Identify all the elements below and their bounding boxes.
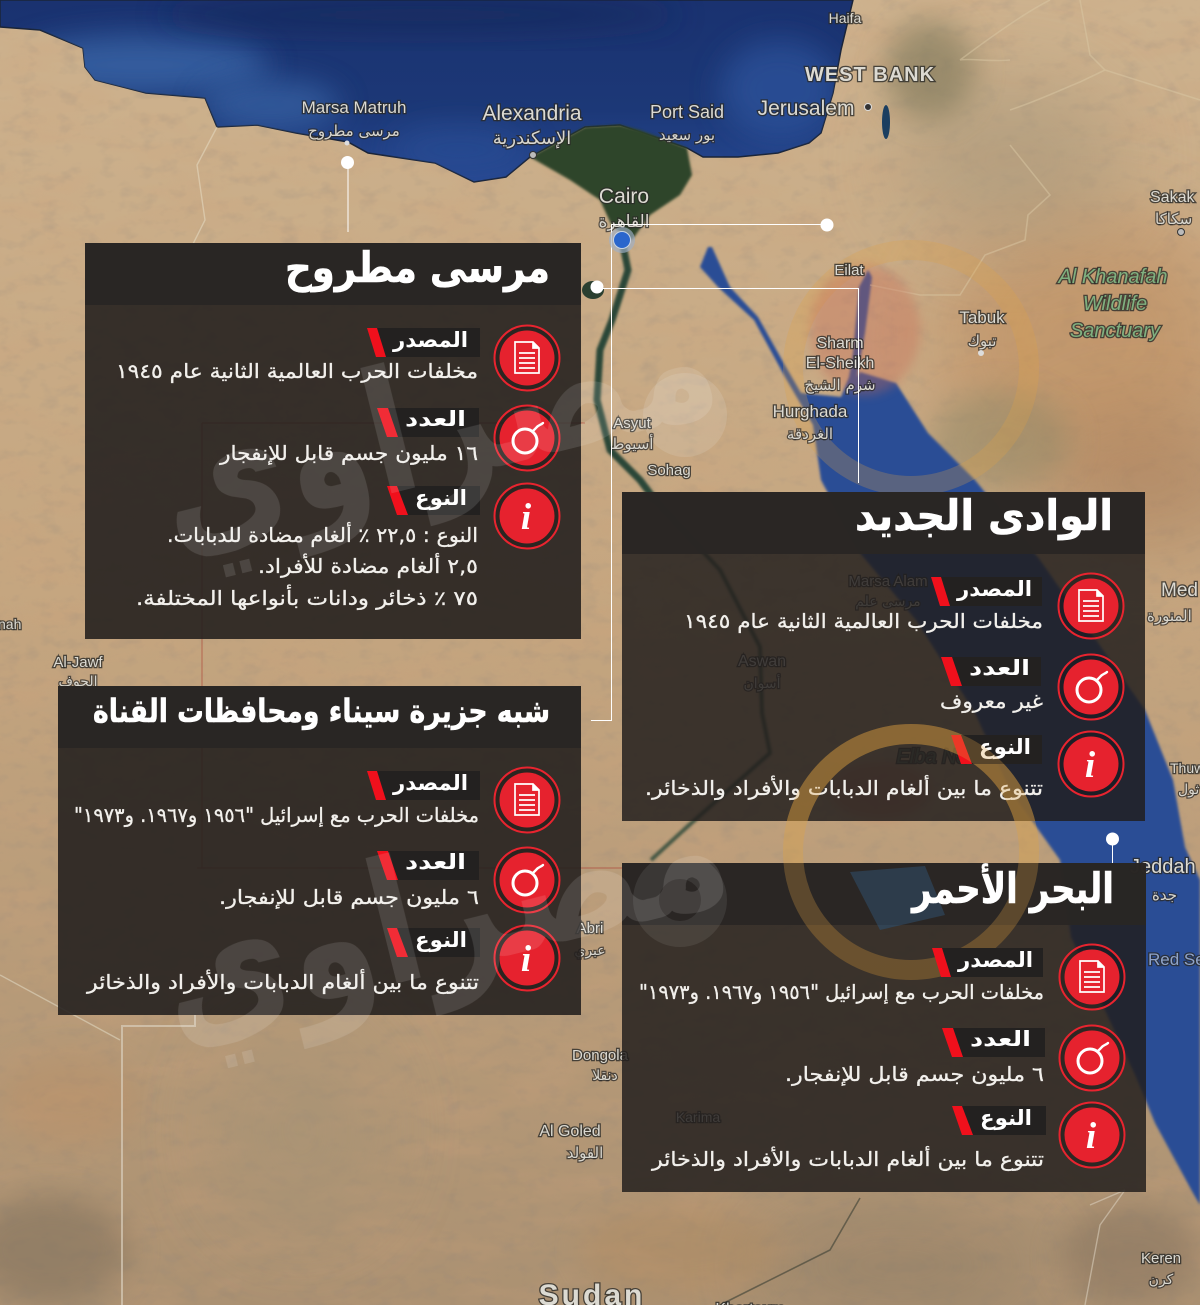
icon: bomb xyxy=(494,406,560,470)
map labels: Jeddah xyxy=(1130,856,1196,878)
map labels: القولد xyxy=(567,1144,603,1162)
count text: ٦ مليون جسم قابل للإنفجار. xyxy=(785,1062,1044,1086)
type text: تتنوع ما بين ألغام الدبابات والأفراد والذخائر xyxy=(651,1146,1044,1171)
tag: count xyxy=(377,407,479,437)
tag: type xyxy=(387,928,480,957)
icon: info xyxy=(494,926,560,990)
map labels: دنقلا xyxy=(592,1068,618,1084)
map labels: Marsa Alam xyxy=(848,573,928,590)
count text: ١٦ مليون جسم قابل للإنفجار xyxy=(219,441,478,465)
tag: type xyxy=(951,735,1042,764)
tag: source xyxy=(931,577,1042,606)
tag: count: العدد xyxy=(969,656,1030,680)
source text: مخلفات الحرب العالمية الثانية عام ١٩٤٥ xyxy=(684,609,1043,633)
map labels: Tabuk xyxy=(959,308,1005,327)
map labels: Eilat xyxy=(834,262,864,279)
map labels: Med xyxy=(1161,580,1198,601)
tag: source: المصدر xyxy=(392,771,468,795)
map labels: Cairo xyxy=(599,185,649,208)
tag: count xyxy=(942,1027,1045,1057)
map labels: Asyut xyxy=(613,415,652,432)
map labels: القاهرة xyxy=(599,212,649,232)
map labels: عبري xyxy=(574,943,606,959)
map labels: Alexandria xyxy=(482,102,582,125)
map labels: الإسكندرية xyxy=(493,128,571,149)
tag: count: العدد xyxy=(405,407,466,431)
watermark: Masrawy logotype: مصراوي xyxy=(137,746,747,1080)
map labels: بور سعيد xyxy=(659,126,715,144)
icon: document xyxy=(1058,574,1124,638)
type text: ٧٥ ٪ ذخائر ودانات بأنواعها المختلفة. xyxy=(136,584,478,610)
map labels: المنورة xyxy=(1147,607,1192,625)
tag: source: المصدر xyxy=(956,577,1032,601)
type text xyxy=(136,522,478,610)
map labels: Dongola xyxy=(572,1047,629,1064)
panel: Red Sea xyxy=(622,734,1146,1192)
panel title: مرسى مطروح xyxy=(285,243,550,293)
map labels: Al Goled xyxy=(539,1123,601,1140)
connector: Marsa Matruh pin xyxy=(341,156,354,232)
panel title: الوادى الجديد xyxy=(855,491,1113,541)
source text: مخلفات الحرب العالمية الثانية عام ١٩٤٥ xyxy=(116,359,478,383)
type text: تتنوع ما بين ألغام الدبابات والأفراد والذخائر xyxy=(86,969,479,994)
type text: تتنوع ما بين ألغام الدبابات والأفراد والذخائر. xyxy=(645,775,1043,800)
map labels: Keren xyxy=(1141,1250,1181,1267)
map labels: Al-Jawf xyxy=(53,654,103,671)
map labels: سكاكا xyxy=(1155,210,1192,228)
icon: info xyxy=(494,484,560,548)
map labels: مرسى مطروح xyxy=(308,122,400,140)
tag: source xyxy=(367,771,480,800)
tag: count xyxy=(377,850,479,880)
connector: Red Sea pin xyxy=(1106,832,1119,863)
map labels: Karima xyxy=(676,1109,720,1125)
map labels: Elba Na xyxy=(896,746,968,768)
map labels: Sharm xyxy=(816,335,864,352)
panel header xyxy=(622,492,1145,554)
tag: source xyxy=(367,328,480,357)
map labels: ثول xyxy=(1178,782,1199,798)
map labels: جدة xyxy=(1152,886,1177,904)
icon: info: i xyxy=(521,497,532,538)
icon: info: i xyxy=(1086,1116,1097,1157)
icon: bomb xyxy=(494,848,560,912)
icon: info xyxy=(1060,1102,1124,1168)
icon: document xyxy=(1060,944,1124,1010)
map labels: Port Said xyxy=(650,102,724,122)
tag: type: النوع xyxy=(979,735,1031,759)
panel: Marsa Matruh xyxy=(85,243,581,639)
panel title: البحر الأحمر xyxy=(910,863,1114,914)
tag: count: العدد xyxy=(970,1027,1031,1051)
connector: New Valley pin xyxy=(590,280,858,483)
connector: Sinai and canal pin xyxy=(591,218,834,720)
map labels: Wildlife xyxy=(1083,293,1147,315)
map labels: Sohag xyxy=(647,462,691,479)
map labels: Marsa Matruh xyxy=(302,98,406,117)
map labels: كرن xyxy=(1149,1272,1174,1288)
map labels: Abri xyxy=(577,920,603,937)
map labels: Haifa xyxy=(829,10,862,26)
watermark ring and shape over Red Sea panel xyxy=(646,734,1029,970)
source text: مخلفات الحرب مع إسرائيل "١٩٥٦ و١٩٦٧. و١٩٧٣" xyxy=(639,980,1044,1005)
panel header xyxy=(58,686,581,748)
panel header xyxy=(85,243,581,305)
count text: غير معروف xyxy=(940,689,1043,713)
icon: info xyxy=(1058,732,1124,796)
tag: type: النوع xyxy=(980,1106,1032,1130)
icon: bomb xyxy=(1060,1026,1124,1090)
tag: type: النوع xyxy=(415,486,467,510)
watermark: Masrawy logotype xyxy=(135,258,747,1080)
map labels: Sakak xyxy=(1150,189,1195,206)
icon: info: i xyxy=(1085,745,1096,786)
tag: source xyxy=(932,948,1043,977)
map labels: El-Sheikh xyxy=(806,355,874,372)
map labels: تبوك xyxy=(968,332,996,350)
map labels: Hurghada xyxy=(773,402,848,421)
icon: document xyxy=(494,768,560,832)
tag: type: النوع xyxy=(415,928,467,952)
map labels: مرسى علم xyxy=(855,594,921,610)
source text: مخلفات الحرب مع إسرائيل "١٩٥٦ و١٩٦٧. و١٩٧٣" xyxy=(74,803,479,828)
map labels: أسيوط xyxy=(611,434,653,453)
tag: source: المصدر xyxy=(957,948,1033,972)
tag: count: العدد xyxy=(405,850,466,874)
map labels: Aswan xyxy=(738,653,786,670)
map labels: Jerusalem xyxy=(758,97,854,120)
count text: ٦ مليون جسم قابل للإنفجار. xyxy=(219,885,479,909)
map labels: الجوف xyxy=(59,674,97,690)
watermark: gold rings xyxy=(643,250,1029,970)
map labels: شرم الشيخ xyxy=(804,376,876,394)
tag: source: المصدر xyxy=(392,328,468,352)
tag: type xyxy=(952,1106,1046,1135)
tag: count xyxy=(941,656,1041,686)
map labels: Al Khanafah xyxy=(1058,266,1167,288)
tag: type xyxy=(387,486,480,515)
watermark: Masrawy logotype: مصراوي xyxy=(135,258,736,589)
type text: النوع : ٢٢,٥ ٪ ألغام مضادة للدبابات. xyxy=(167,522,478,547)
type text: ٢,٥ ألغام مضادة للأفراد. xyxy=(258,553,478,578)
icon: document xyxy=(494,326,560,390)
icon: bomb xyxy=(1058,654,1124,720)
panel: Sinai and Canal governorates xyxy=(58,686,581,1015)
panel header xyxy=(622,863,1146,925)
map labels: الغردقة xyxy=(787,425,833,443)
watermark ring over New Valley panel xyxy=(786,724,1036,821)
panel: New Valley xyxy=(622,492,1145,821)
icon: info: i xyxy=(521,939,532,980)
map labels: Sanctuary xyxy=(1070,320,1161,342)
panel title: شبه جزيرة سيناء ومحافظات القناة xyxy=(93,692,550,730)
map labels: WEST BANK xyxy=(805,64,935,86)
map labels: أسوان xyxy=(743,674,781,692)
Cairo location marker xyxy=(609,227,635,253)
